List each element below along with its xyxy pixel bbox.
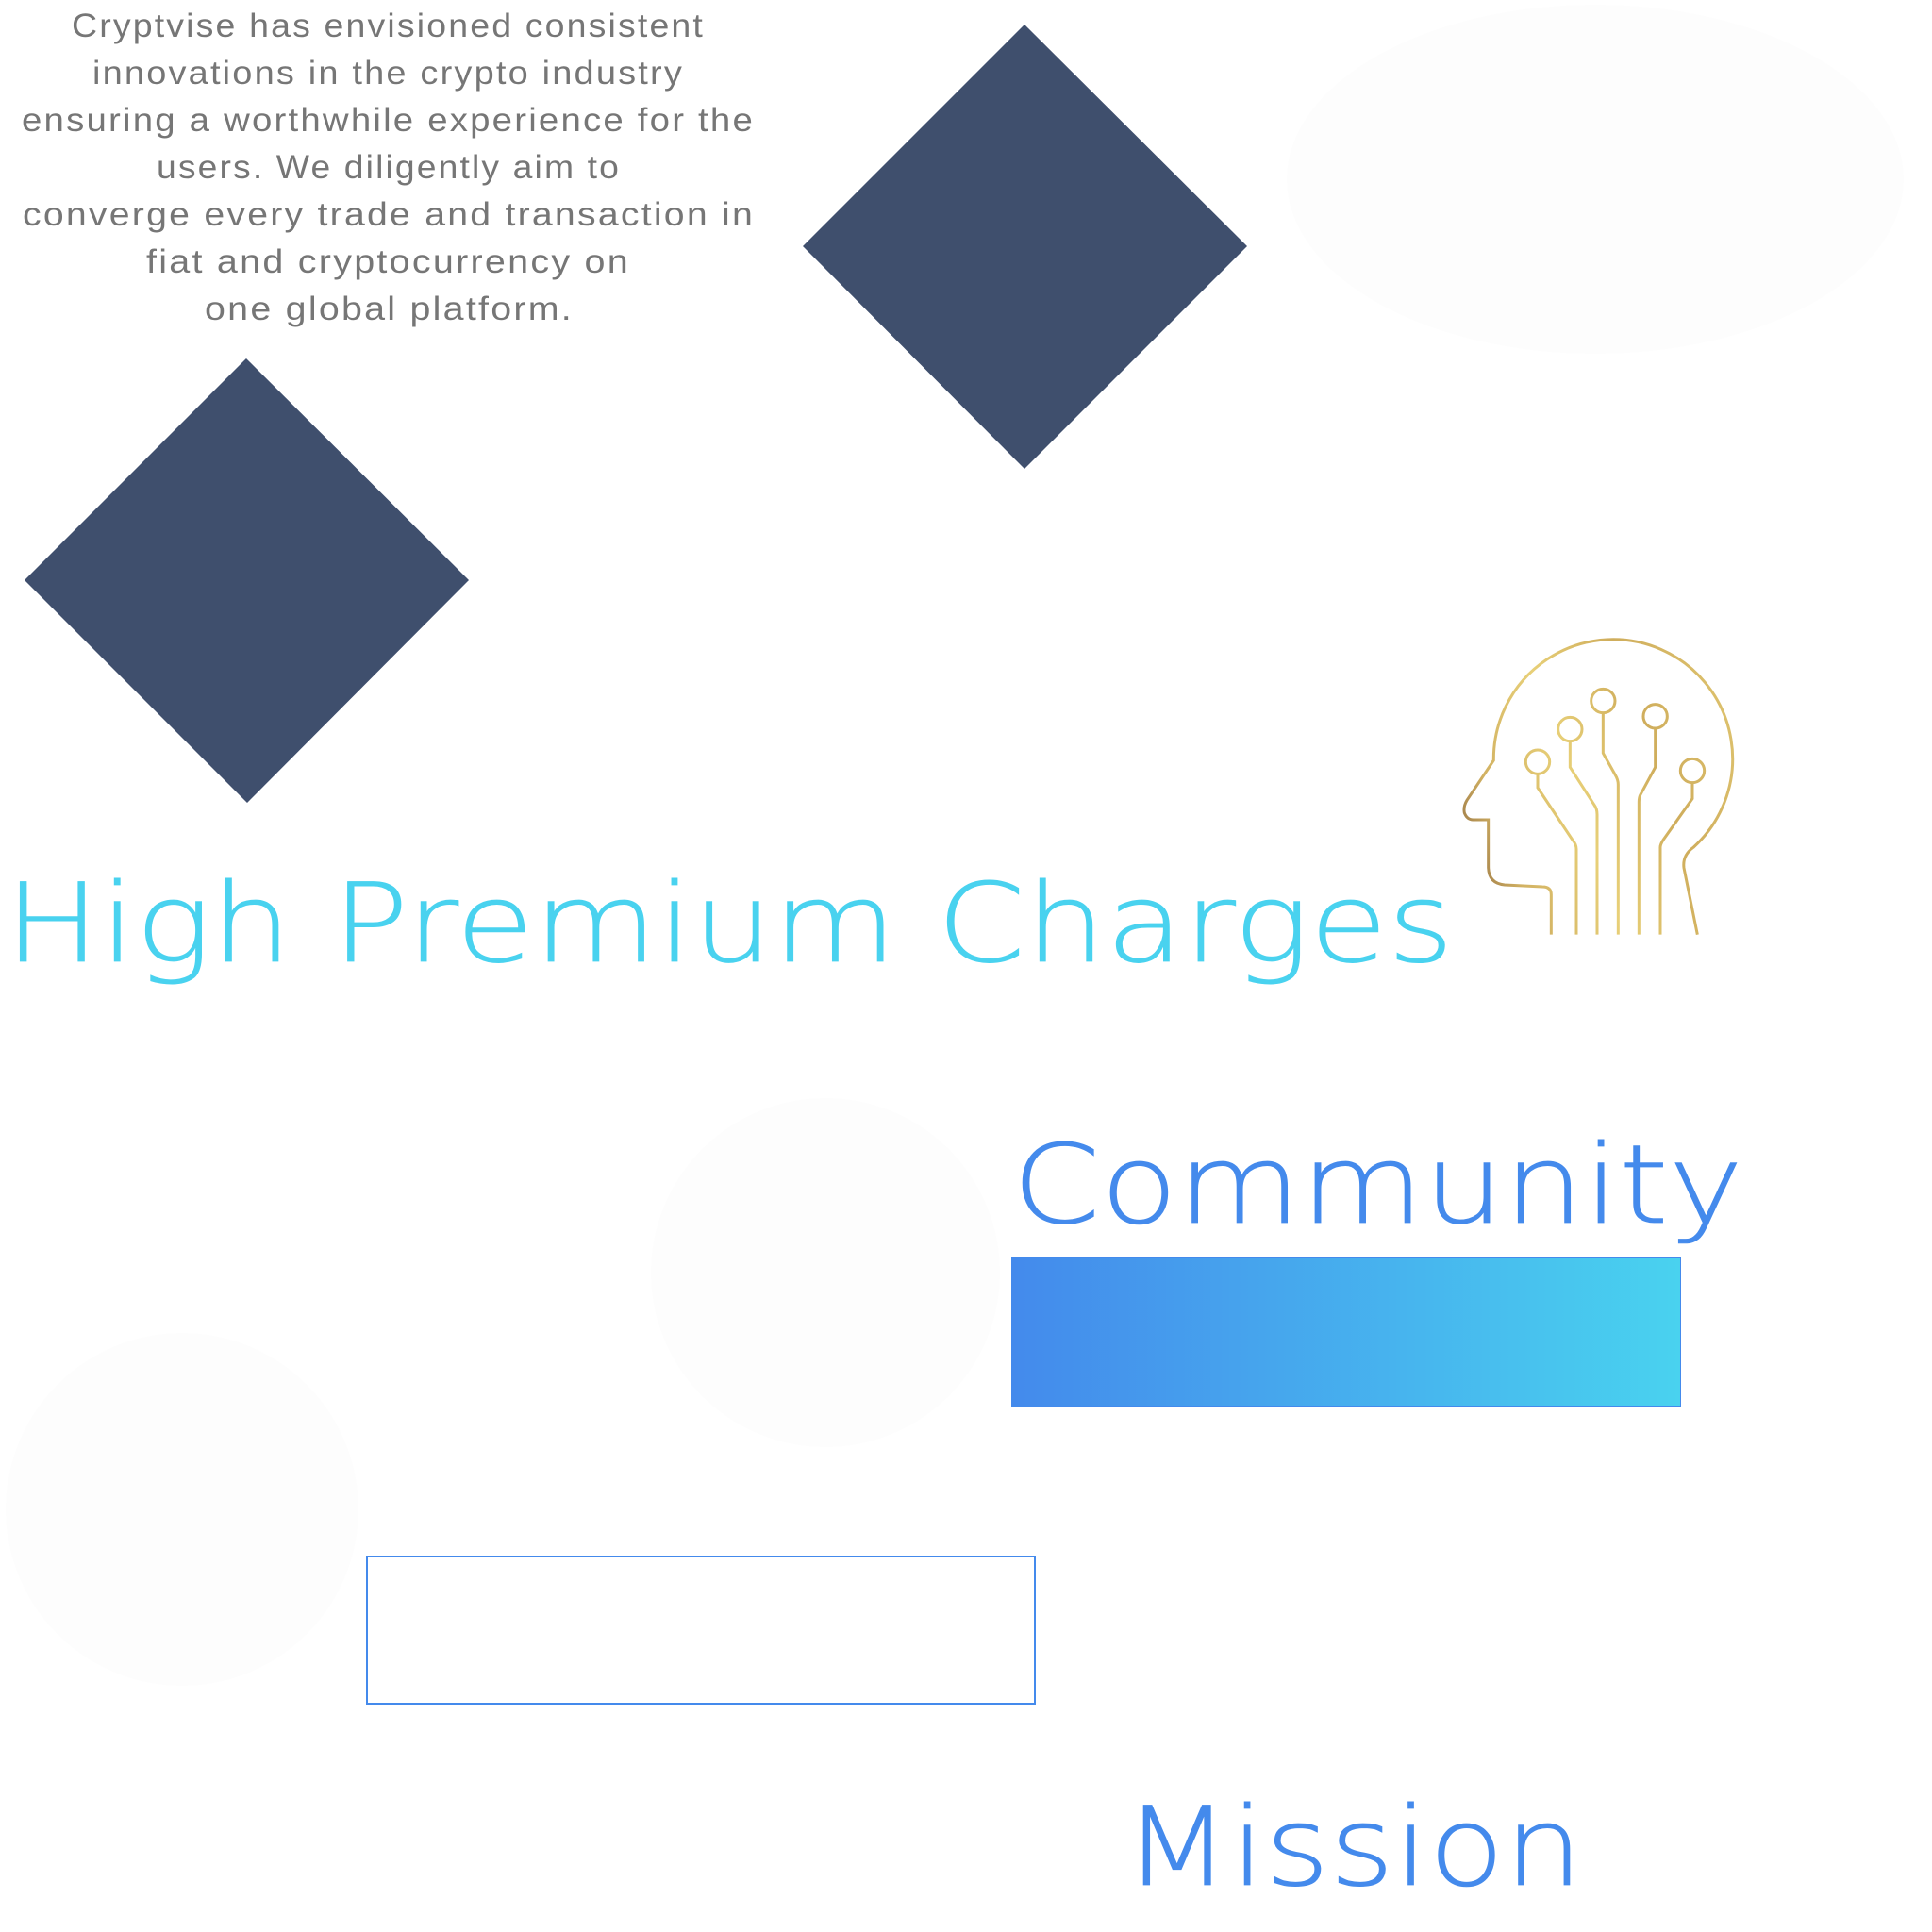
diamond: top centre [803, 25, 1247, 469]
heading: Mission: Mission [1124, 1784, 1583, 1911]
outlined box [367, 1557, 1035, 1704]
intro text block: users. We diligently aim to [157, 149, 621, 186]
intro text block [22, 8, 755, 327]
intro text block: innovations in the crypto industry [92, 55, 684, 92]
intro text block: Cryptvise has envisioned consistent [72, 8, 705, 44]
heading: Community: Community [1012, 1122, 1743, 1249]
heading: High Premium Charges: High Premium Charges [5, 860, 1454, 988]
diamond: left [25, 358, 469, 803]
intro text block: one global platform. [205, 291, 574, 327]
gradient bar [1011, 1258, 1681, 1406]
intro text block: fiat and cryptocurrency on [146, 243, 630, 280]
intro text block: ensuring a worthwhile experience for the [22, 102, 755, 139]
icon: head with circuit brain [1464, 640, 1733, 935]
faint circle: lower left [6, 1333, 358, 1686]
faint circle: centre [651, 1098, 1000, 1447]
intro text block: converge every trade and transaction in [23, 196, 755, 233]
faint ellipse: top right [1287, 5, 1904, 354]
